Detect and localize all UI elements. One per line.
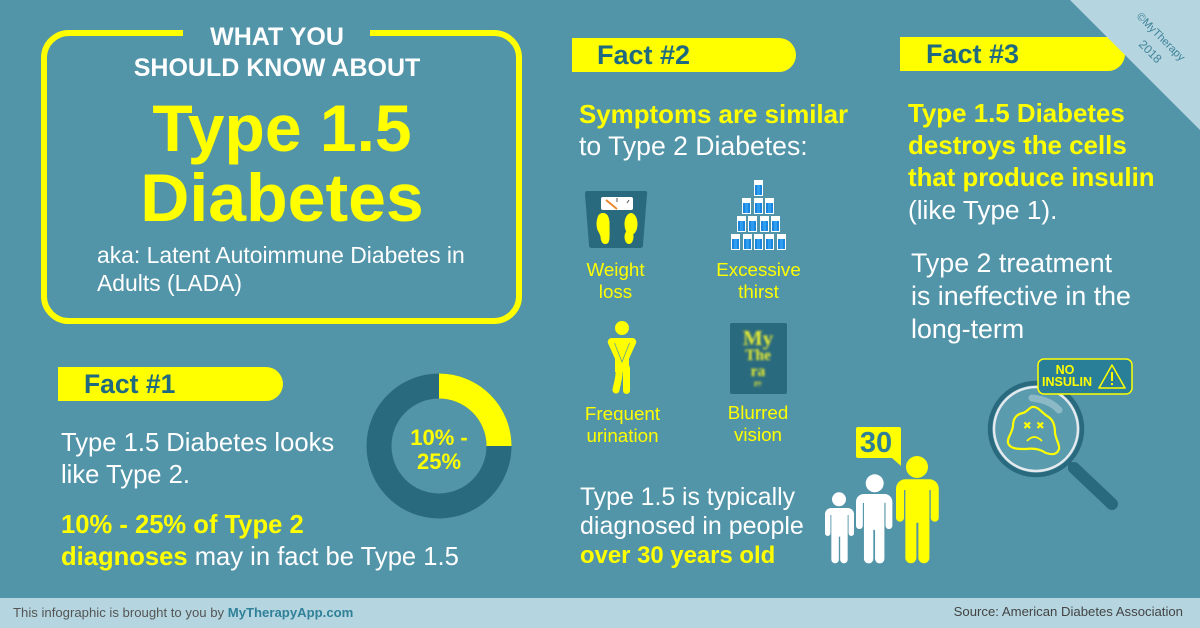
fact 2 heading: to Type 2 Diabetes: [579,131,808,161]
label: blurred vision: vision [734,424,782,445]
icon: three people with age bubble [825,427,939,563]
age text: diagnosed in people [580,512,804,540]
footer bar: This infographic is brought to you by MyTherapyApp.com [13,605,353,620]
copyright text: ©MyTherapy [1134,11,1187,64]
age text: over 30 years old [580,542,775,569]
footer bar [0,598,1200,628]
label: frequent urination [585,403,661,446]
label: frequent urination: Frequent [585,403,661,424]
age text [580,484,804,569]
icon: person needing to urinate [611,321,633,390]
title box: Diabetes [140,160,424,236]
fact 2 pill [572,38,796,72]
badge: no insulin warning [1038,359,1132,394]
label: excessive thirst: Excessive [716,259,801,280]
copyright text: 2018 [1136,37,1165,66]
title box: Adults (LADA) [97,270,242,296]
icon: weight scale [585,191,647,248]
fact 3 text: Type 1.5 Diabetes [908,100,1125,128]
label: blurred vision [728,402,788,445]
label: excessive thirst [716,259,801,302]
panel: fact 2 [572,38,939,569]
title box [44,23,519,321]
fact 3 text: (like Type 1). [908,195,1057,225]
fact 2 pill: Fact #2 [597,40,690,70]
icon: blurred eye chart: My [743,326,774,350]
fact 1 text: like Type 2. [61,461,190,489]
footer bar: Source: American Diabetes Association [954,604,1183,619]
fact 2 heading: Symptoms are similar [579,101,848,129]
badge: no insulin warning: NO [1056,363,1075,377]
icon: magnifying glass with sad cell [990,383,1112,504]
icon: glasses of water [731,180,786,250]
corner ribbon [1070,0,1200,130]
fact 3 pill: Fact #3 [926,39,1019,69]
label: weight loss: loss [599,281,632,302]
fact 3 text: long-term [911,314,1024,344]
title box: WHAT YOU [210,23,344,51]
title box: aka: Latent Autoimmune Diabetes in [97,242,465,268]
fact 3 text: Type 2 treatment [911,248,1113,278]
fact 1 pill: Fact #1 [84,369,175,399]
title box: Type 1.5 [152,91,412,165]
label: excessive thirst: thirst [738,281,780,302]
panel: fact 1 [58,367,499,571]
badge: no insulin warning: INSULIN [1042,375,1092,389]
fact 3 text: that produce insulin [908,164,1155,192]
fact 3 text: destroys the cells [908,132,1127,160]
icon: blurred eye chart: ra [751,363,766,380]
label: blurred vision: Blurred [728,402,788,423]
age text: Type 1.5 is typically [580,484,796,511]
label: weight loss: Weight [586,259,645,280]
panel: fact 3 [900,37,1155,504]
fact 3 pill [900,37,1125,71]
fact 1 text: 10% - 25% of Type 2 [61,511,304,539]
icon: blurred eye chart: py [754,379,762,387]
donut chart: 25% [417,449,461,474]
label: weight loss [586,259,645,302]
fact 1 text: Type 1.5 Diabetes looks [61,429,334,457]
fact 1 text [61,429,459,571]
donut chart [379,386,499,506]
fact 1 pill [58,367,283,401]
icon: blurred eye chart [730,323,787,394]
icon: blurred eye chart: The [745,347,771,364]
fact 2 heading [579,101,848,161]
donut chart: 10% - [410,425,468,450]
fact 1 text: diagnoses may in fact be Type 1.5 [61,543,459,571]
speech bubble 30: 30 [860,427,892,459]
title box: SHOULD KNOW ABOUT [134,54,420,82]
label: frequent urination: urination [586,425,659,446]
fact 3 text [908,100,1155,344]
fact 3 text: is ineffective in the [911,281,1131,311]
